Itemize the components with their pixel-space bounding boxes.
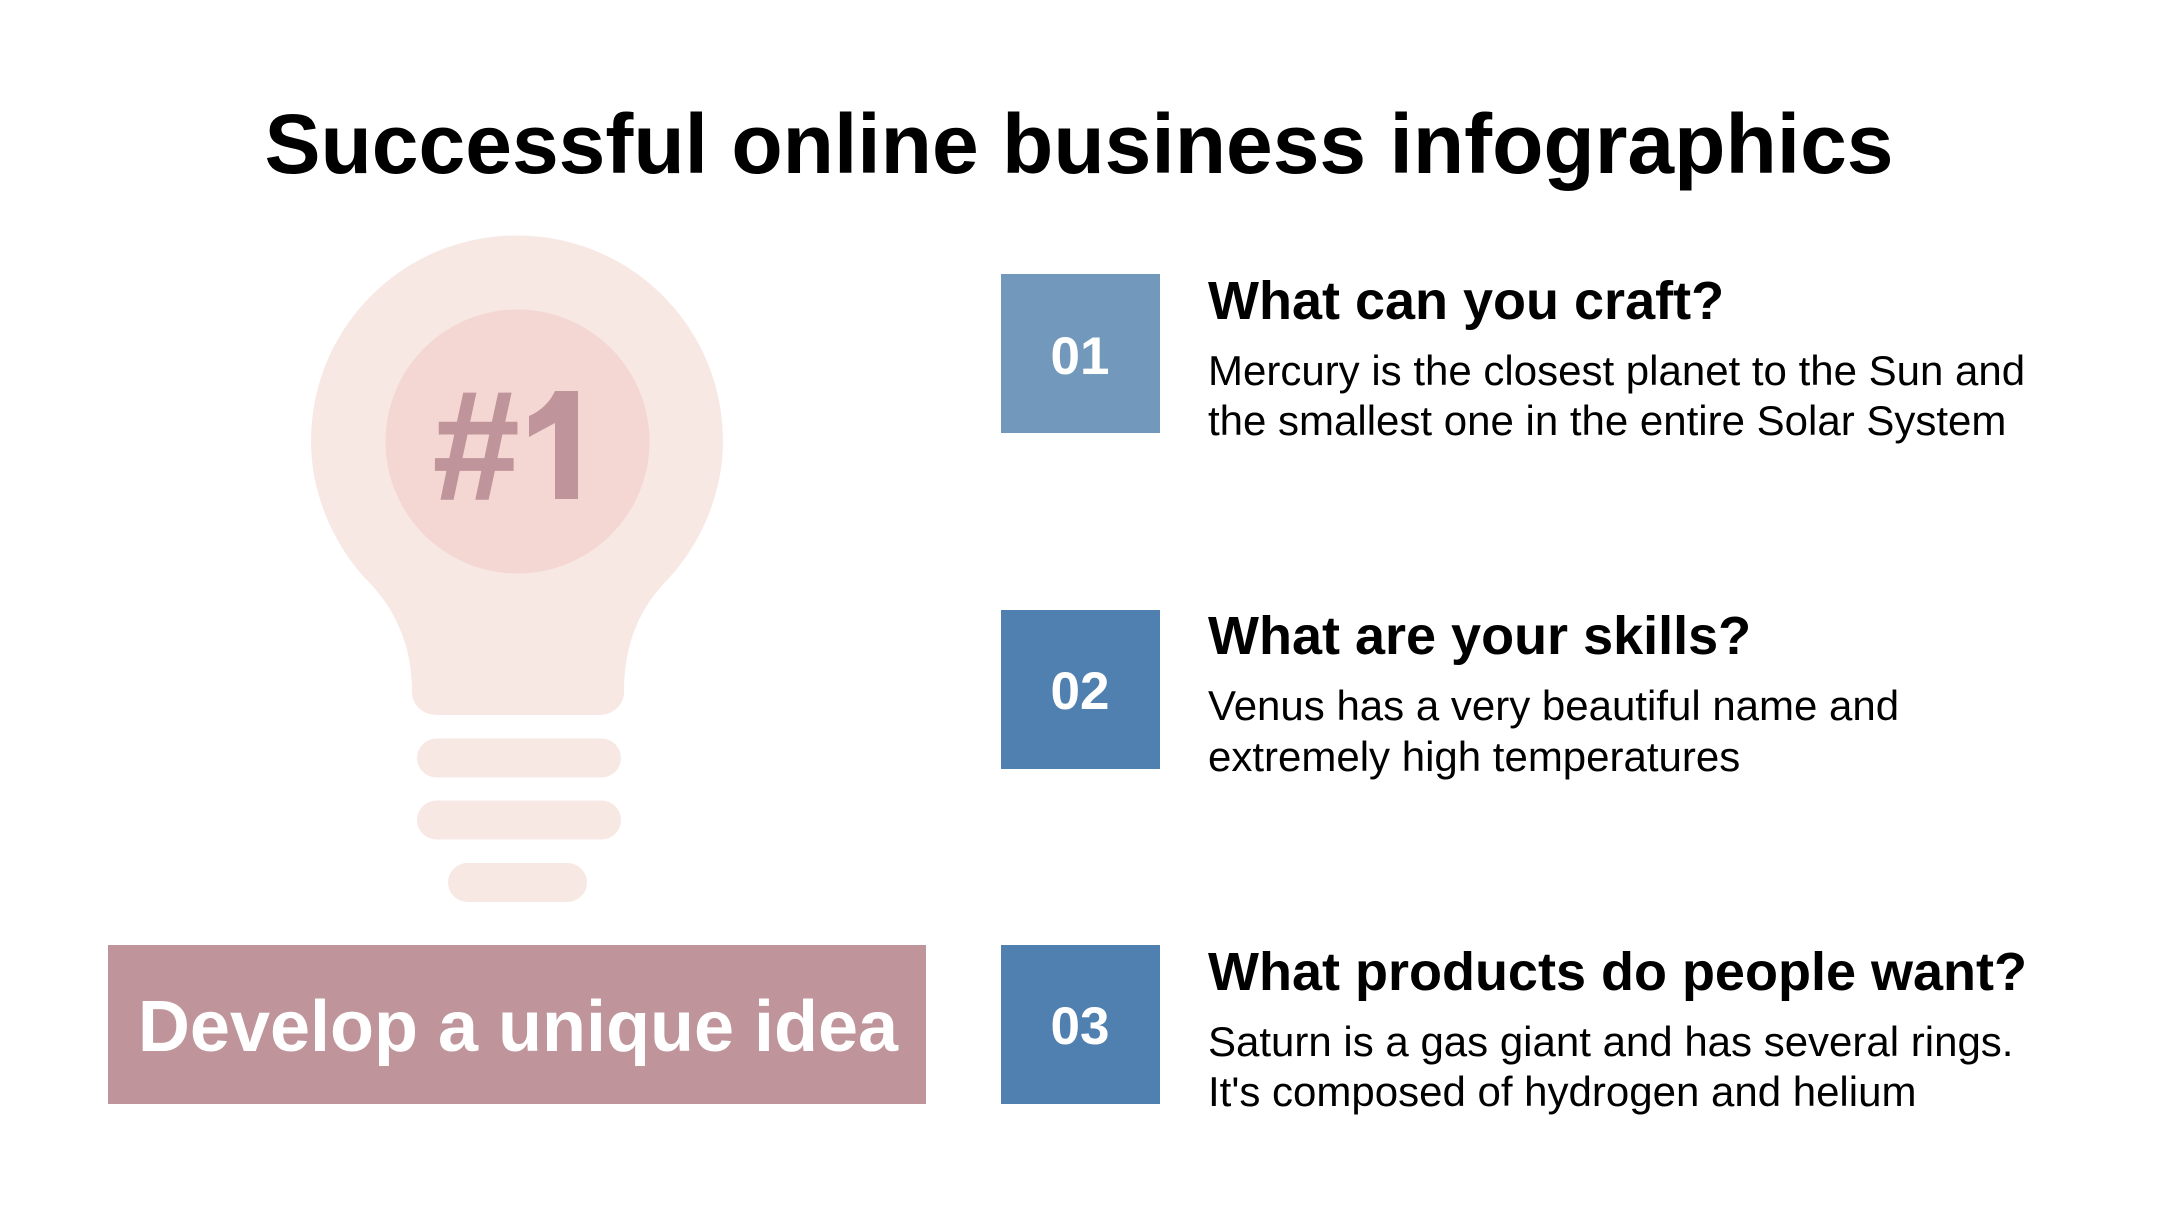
description 02: extremely high temperatures: [1208, 733, 1740, 780]
title: Successful online business infographics: [264, 97, 1894, 191]
item 02: [1001, 606, 1899, 780]
rank number: [434, 391, 578, 500]
number box 02: 02: [1051, 662, 1109, 721]
heading 03: What products do people want?: [1208, 942, 2027, 1002]
heading 02: What are your skills?: [1208, 606, 1751, 666]
heading 01: What can you craft?: [1208, 271, 1724, 331]
number box 02: [1001, 610, 1160, 769]
description 01: the smallest one in the entire Solar System: [1208, 397, 2006, 444]
bulb glass: [311, 236, 723, 715]
item 01: [1001, 271, 2025, 444]
description 03: Saturn is a gas giant and has several rings.: [1208, 1018, 2013, 1065]
description 02: Venus has a very beautiful name and: [1208, 682, 1899, 729]
banner: develop a unique idea: [108, 945, 926, 1104]
bulb base bar 1: [417, 738, 621, 778]
item 03: [1001, 942, 2027, 1115]
bulb base bar 3: [448, 863, 587, 902]
banner: develop a unique idea: Develop a unique idea: [138, 987, 899, 1067]
rank number: 1: [530, 359, 617, 532]
icon: light bulb: [311, 236, 723, 902]
number box 01: 01: [1051, 327, 1109, 386]
description 03: It's composed of hydrogen and helium: [1208, 1068, 1916, 1115]
description 01: Mercury is the closest planet to the Sun and: [1208, 347, 2025, 394]
number box 03: [1001, 945, 1160, 1104]
number box 03: 03: [1051, 997, 1109, 1056]
bulb inner circle: [386, 310, 650, 574]
number box 01: [1001, 274, 1160, 433]
rank number: #: [433, 359, 519, 532]
bulb base bar 2: [417, 800, 621, 840]
